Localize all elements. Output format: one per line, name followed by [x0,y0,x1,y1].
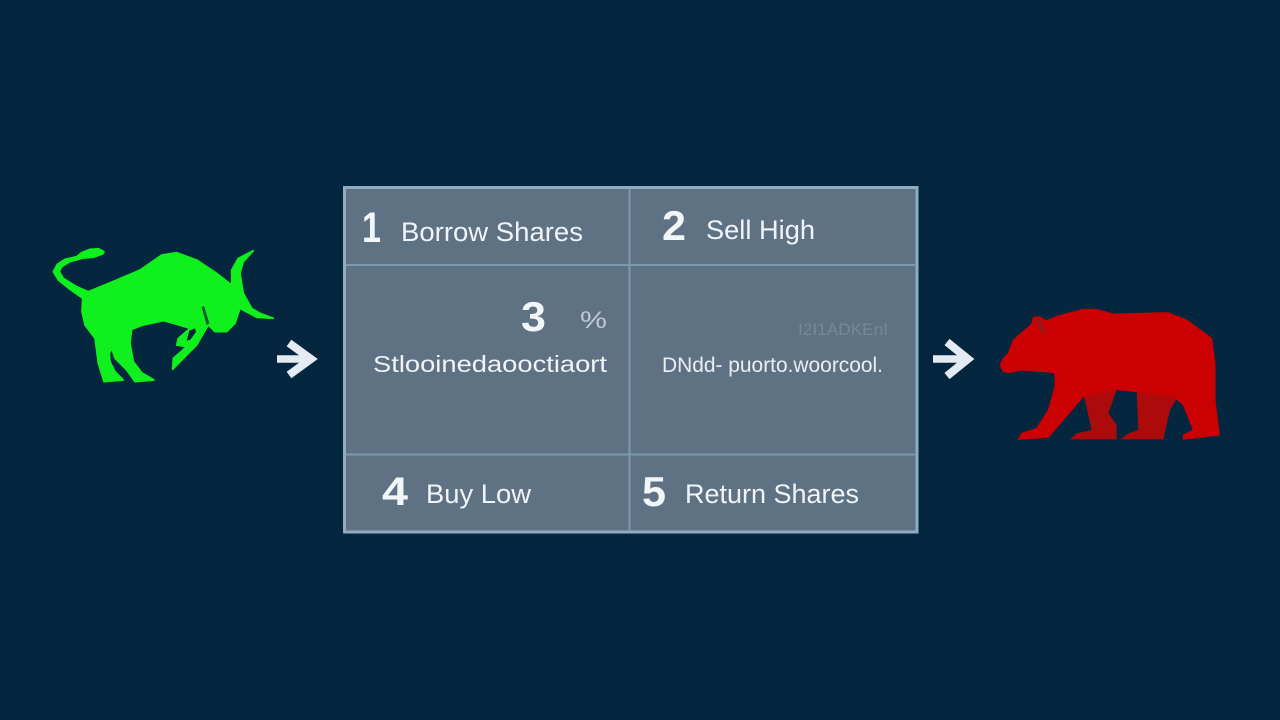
arrow: table to bear [933,342,968,376]
step 4: buy low: 4 [382,470,409,514]
step 1: borrow shares: 1 [362,204,381,252]
step 2: sell high: 2 [662,202,686,249]
step 1: borrow shares: Borrow Shares [401,217,583,247]
step 4: buy low [382,470,532,514]
icon: green bull [53,249,273,382]
centre-right cell text: I2I1ADKEnI [798,320,888,339]
step 3: centre-left cell: Stlooinedaooctiaort [373,351,608,377]
step 2: sell high [662,202,815,249]
panel: five-step table [344,188,917,532]
step 3: centre-left cell [373,293,608,377]
step 2: sell high: Sell High [706,215,815,245]
step 3: centre-left cell: 3 [521,293,546,340]
step 5: return shares [642,468,859,515]
arrow: bull to table [277,343,311,375]
step 4: buy low: Buy Low [426,479,532,509]
icon: red bear [1000,309,1219,439]
step 3: centre-left cell: % [580,307,607,334]
step 1: borrow shares [362,204,583,252]
centre-right cell text [662,320,888,377]
centre-right cell text: DNdd- puorto.woorcool. [662,354,883,377]
step 5: return shares: Return Shares [685,479,859,509]
step 5: return shares: 5 [642,468,666,515]
